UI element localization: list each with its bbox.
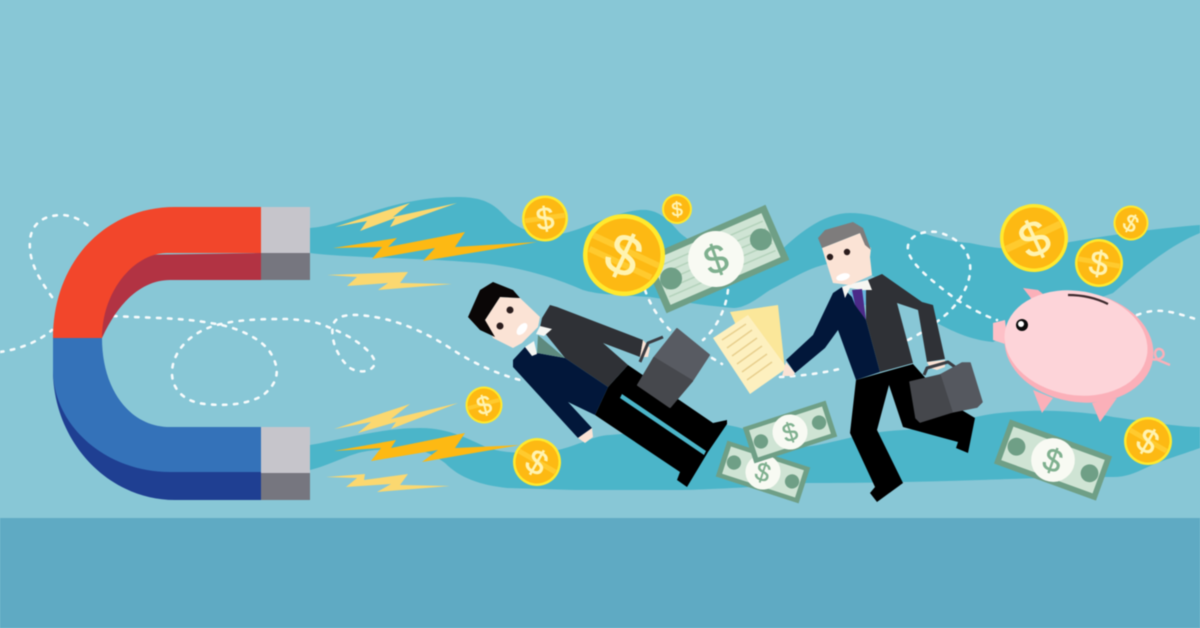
coin <box>519 193 571 244</box>
eye <box>1016 319 1028 331</box>
upper teal wave <box>310 197 1200 342</box>
coin slot <box>1068 295 1108 304</box>
floor band <box>0 518 1200 628</box>
coin: $ <box>473 389 495 421</box>
hands <box>782 360 945 376</box>
back leg <box>889 364 975 453</box>
bill on top: $ <box>779 415 802 449</box>
hands <box>578 340 650 443</box>
blue arm dark shade <box>53 338 261 500</box>
businessman falling toward magnet <box>468 282 727 487</box>
head <box>468 282 540 348</box>
navy jacket side <box>786 287 880 380</box>
head <box>818 222 872 285</box>
large coin <box>570 201 678 309</box>
snout <box>993 320 1008 345</box>
large coin: $ <box>595 219 652 292</box>
ear <box>1023 288 1048 308</box>
top lightning bolts <box>327 203 537 290</box>
dark jacket side <box>540 305 643 387</box>
coin <box>1115 408 1181 474</box>
legs <box>1033 390 1117 422</box>
small coin <box>661 193 693 225</box>
bottom lightning bolts <box>326 403 520 492</box>
paper sheets <box>713 305 787 394</box>
bottom metal pole <box>261 427 310 500</box>
coin <box>989 193 1079 283</box>
collar and tie <box>525 326 565 358</box>
leg gap <box>620 394 706 455</box>
coin <box>1071 235 1127 291</box>
coin <box>461 382 507 428</box>
red arm <box>53 207 261 338</box>
coin: $ <box>1086 244 1112 284</box>
briefcase <box>638 329 709 407</box>
small coin: $ <box>1118 209 1143 239</box>
dark jacket side <box>866 274 945 372</box>
bill underneath: $ <box>751 456 775 489</box>
top metal pole <box>261 207 310 280</box>
coin <box>504 429 570 495</box>
small coin: $ <box>671 199 684 221</box>
dollar bills pile <box>716 401 837 503</box>
small coin <box>1107 199 1155 247</box>
dollar bill under piggy bank <box>994 419 1112 501</box>
coin: $ <box>1130 421 1165 463</box>
coin: $ <box>534 199 557 238</box>
legs <box>595 365 727 487</box>
tail <box>1148 349 1170 365</box>
businessman running <box>782 222 982 502</box>
lower teal wave <box>310 411 1200 490</box>
large dollar bill <box>643 205 789 313</box>
large dollar bill: $ <box>699 235 734 284</box>
dollar bill under piggy bank: $ <box>1038 440 1068 480</box>
dashed flight paths <box>0 215 1200 405</box>
blue arm <box>53 338 261 472</box>
magnet <box>53 207 310 500</box>
briefcase <box>910 362 982 422</box>
body <box>996 279 1162 414</box>
coin: $ <box>519 442 554 484</box>
red arm back shade <box>96 253 261 338</box>
shirt collar and tie <box>842 280 872 320</box>
coin: $ <box>1010 208 1059 270</box>
piggy bank <box>993 279 1170 422</box>
navy jacket side <box>513 347 608 438</box>
front leg <box>850 364 917 502</box>
